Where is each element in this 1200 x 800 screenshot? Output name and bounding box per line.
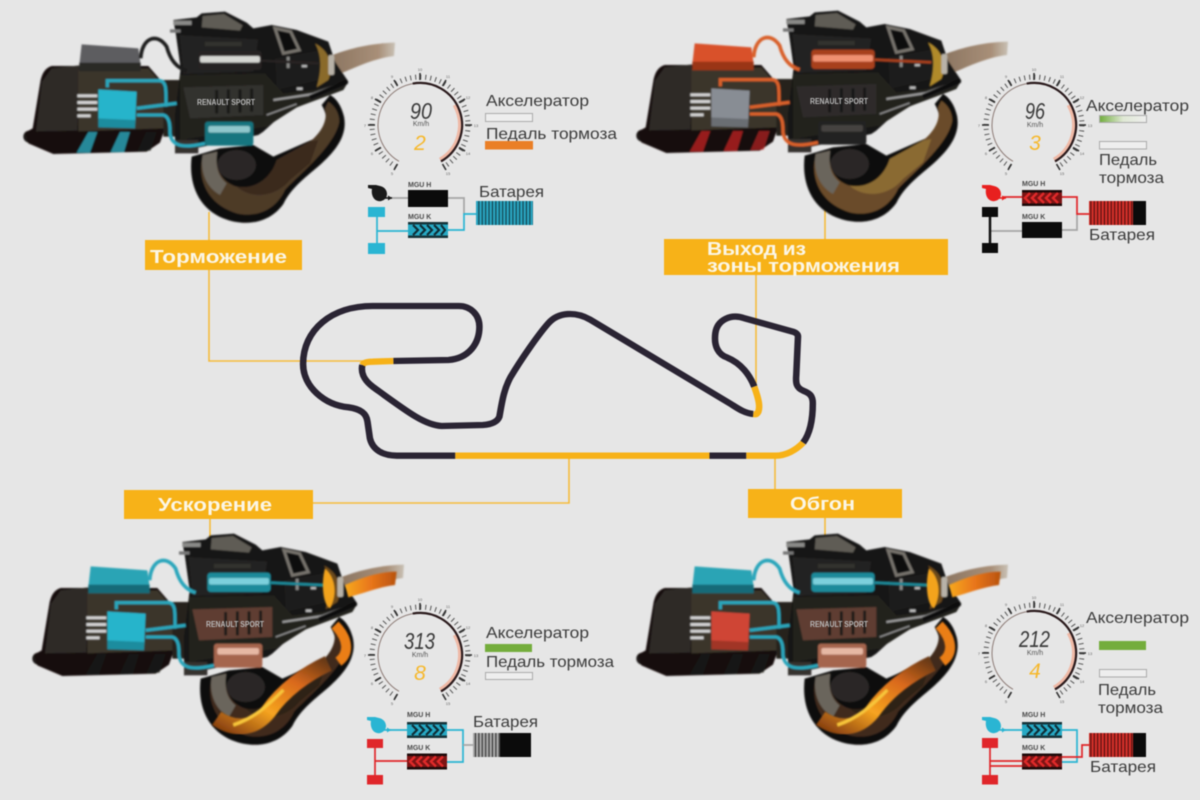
- pedals: Акселератор: [1086, 98, 1189, 115]
- gauge: [364, 67, 479, 176]
- gauge: 96: [1025, 98, 1045, 124]
- engine: overtake: [636, 534, 1008, 745]
- panel: acceleration data: [364, 597, 614, 784]
- powertrain diagram: MGU H: [1022, 181, 1045, 188]
- pedals: Педаль тормоза: [486, 654, 614, 671]
- gauge: Km/h: [412, 652, 428, 659]
- heading tag: exit from braking zone: [664, 239, 948, 276]
- pedals: [485, 625, 614, 680]
- connector lines: [209, 208, 825, 540]
- pedals: Педаль: [1098, 682, 1156, 699]
- gauge: 3: [1029, 132, 1041, 155]
- engine: exit from braking zone: RENAULT SPORT: [810, 97, 868, 106]
- pedals: тормоза: [1098, 700, 1163, 717]
- gauge: 2: [413, 132, 426, 155]
- gauge: 8: [414, 662, 426, 685]
- engine: braking: RENAULT SPORT: [197, 98, 255, 107]
- pedals: тормоза: [1099, 170, 1164, 187]
- gauge: Km/h: [413, 121, 429, 128]
- powertrain diagram: Батарея: [479, 184, 544, 201]
- powertrain diagram: MGU H: [408, 182, 431, 189]
- powertrain diagram: MGU K: [1022, 745, 1045, 752]
- pedals: Педаль тормоза: [486, 126, 617, 143]
- heading tag: braking: Торможение: [150, 247, 287, 267]
- engine: acceleration: [32, 534, 404, 745]
- heading tag: acceleration: [124, 490, 313, 519]
- powertrain diagram: MGU H: [1022, 712, 1045, 719]
- engine: exit from braking zone: [636, 11, 1008, 222]
- heading tag: overtake: [748, 489, 902, 518]
- pedals: Акселератор: [486, 625, 589, 642]
- heading tag: acceleration: Ускорение: [158, 495, 272, 515]
- race track map: [303, 306, 813, 456]
- powertrain diagram: MGU K: [408, 214, 431, 221]
- powertrain diagram: MGU K: [1022, 214, 1045, 221]
- panel: overtake data: [978, 595, 1189, 784]
- panel: exit from braking data: [978, 67, 1189, 253]
- pedals: [1086, 98, 1189, 187]
- engine: overtake: RENAULT SPORT: [810, 620, 868, 629]
- powertrain diagram: [367, 712, 538, 784]
- engine: acceleration: RENAULT SPORT: [206, 620, 264, 629]
- powertrain diagram: Батарея: [1090, 759, 1156, 776]
- gauge: Km/h: [1027, 650, 1043, 657]
- pedals: [485, 93, 617, 150]
- powertrain diagram: MGU K: [407, 745, 430, 752]
- pedals: Акселератор: [1086, 610, 1189, 627]
- pedals: Педаль: [1099, 152, 1157, 169]
- gauge: [978, 67, 1093, 176]
- gauge: [978, 595, 1093, 704]
- panel: braking data: [364, 67, 617, 254]
- powertrain diagram: MGU H: [407, 712, 430, 719]
- gauge: 313: [404, 628, 435, 654]
- gauge: 4: [1029, 660, 1041, 683]
- powertrain diagram: [368, 182, 544, 254]
- pedals: [1086, 610, 1189, 717]
- powertrain diagram: Батарея: [1089, 227, 1155, 244]
- gauge: 212: [1018, 626, 1050, 652]
- heading tag: exit from braking zone: Выход из: [707, 239, 806, 259]
- heading tag: braking: [145, 240, 302, 270]
- gauge: Km/h: [1027, 122, 1043, 129]
- heading tag: exit from braking zone: зоны торможения: [707, 256, 900, 276]
- powertrain diagram: Батарея: [473, 714, 538, 731]
- pedals: Акселератор: [486, 93, 589, 110]
- powertrain diagram: [982, 181, 1155, 253]
- engine: braking: [23, 12, 395, 223]
- gauge: 90: [410, 98, 432, 124]
- gauge: [364, 597, 479, 706]
- powertrain diagram: [982, 712, 1156, 784]
- heading tag: overtake: Обгон: [790, 494, 855, 514]
